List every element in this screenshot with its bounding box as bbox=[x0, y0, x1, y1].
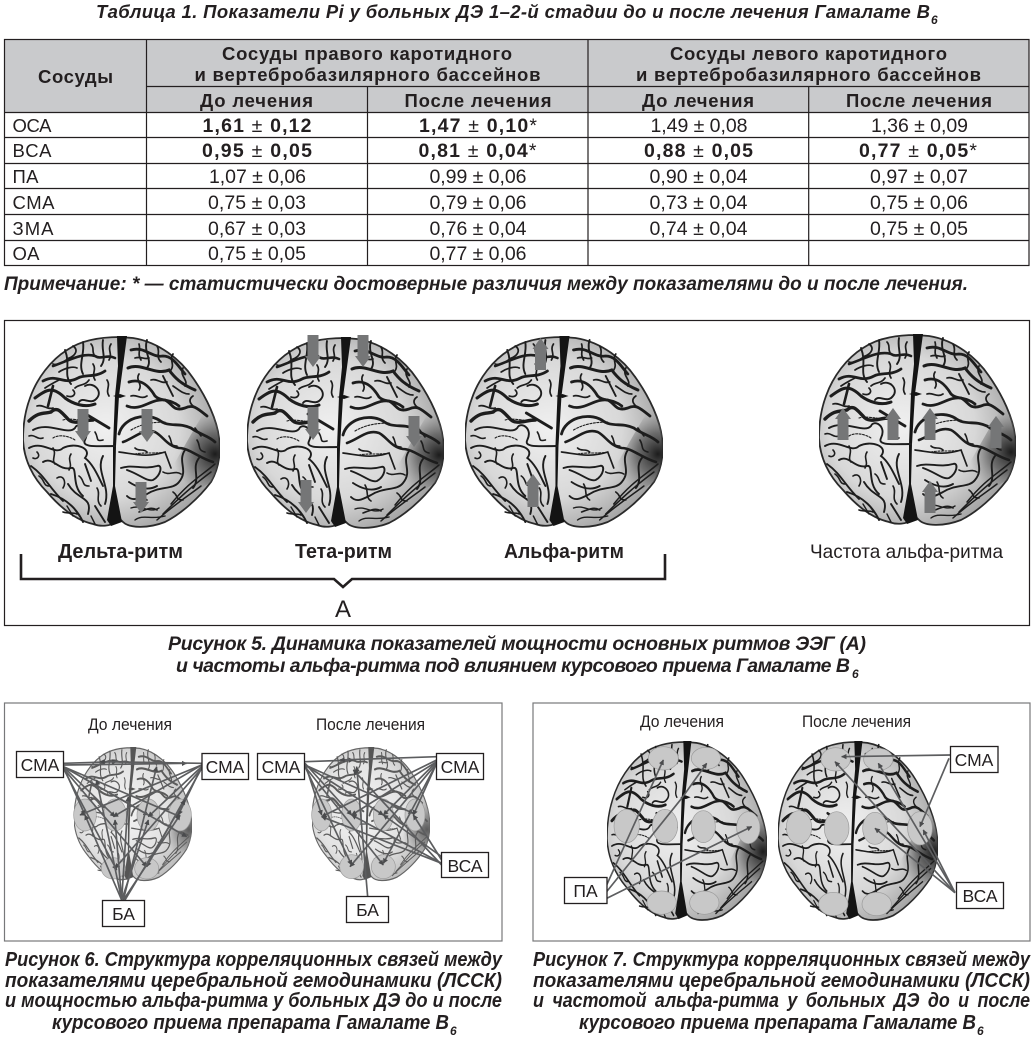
row: ОСА: 1,47 ± 0,10* bbox=[419, 115, 537, 137]
row: ВСА: 0,81 ± 0,04* bbox=[418, 140, 537, 162]
label box: БА, after: БА bbox=[356, 900, 379, 920]
figure 6 caption: и мощностью альфа-ритма у больных ДЭ до и после bbox=[5, 989, 502, 1012]
label: theta rhythm: Тета-ритм bbox=[295, 541, 392, 563]
label: before treatment: До лечения bbox=[88, 716, 172, 734]
brain with correlations: before bbox=[63, 747, 202, 900]
label: delta rhythm: Дельта-ритм bbox=[58, 541, 183, 563]
table note: Примечание: * — статистически достоверные различия между показателями до и после лечения. bbox=[4, 274, 968, 295]
table header: Сосуды левого каротидного bbox=[670, 43, 947, 64]
table header: и вертебробазилярного бассейнов bbox=[194, 64, 540, 85]
row: ЗМА: 0,74 ± 0,04 bbox=[650, 218, 748, 240]
row: СМА: 0,79 ± 0,06 bbox=[430, 192, 526, 214]
table header: Сосуды bbox=[38, 66, 113, 87]
table header: До лечения bbox=[200, 90, 313, 111]
brain with regions: after bbox=[778, 741, 955, 920]
label box: ВСА: ВСА bbox=[962, 886, 998, 906]
brain with regions: before bbox=[607, 741, 767, 920]
row: ОСА: 1,49 ± 0,08 bbox=[650, 115, 748, 137]
row: ВСА: 0,88 ± 0,05 bbox=[644, 140, 753, 162]
figure 7 caption bbox=[533, 948, 1031, 1038]
figure 6 caption: 6 bbox=[450, 1024, 457, 1038]
bracket A bbox=[21, 554, 665, 587]
row: ПА: 0,97 ± 0,07 bbox=[870, 166, 968, 188]
figure 5 caption: Рисунок 5. Динамика показателей мощности основных ритмов ЭЭГ (А) bbox=[168, 633, 866, 655]
row: ПА: 0,99 ± 0,06 bbox=[430, 166, 526, 188]
brain: alpha frequency bbox=[819, 334, 1016, 525]
label: alpha rhythm: Альфа-ритм bbox=[504, 541, 624, 563]
row: ПА: 1,07 ± 0,06 bbox=[209, 166, 306, 188]
label box: СМА left, before bbox=[16, 752, 64, 778]
table header: После лечения bbox=[404, 90, 552, 111]
figure 6 caption: Рисунок 6. Структура корреляционных связей между bbox=[5, 948, 503, 971]
label box: СМА bbox=[950, 746, 998, 772]
row: ОА bbox=[12, 243, 526, 265]
label: A: А bbox=[335, 596, 351, 623]
row: ЗМА: 0,75 ± 0,05 bbox=[870, 218, 968, 240]
panel: figure 5 bbox=[4, 320, 1030, 626]
row: ПА bbox=[12, 166, 968, 188]
figure 5 caption: и частоты альфа-ритма под влиянием курсового приема Гамалате В bbox=[176, 655, 850, 677]
table title: 6 bbox=[931, 13, 938, 27]
label box: СМА right, after: СМА bbox=[441, 757, 480, 777]
row: ОСА: 1,61 ± 0,12 bbox=[202, 115, 312, 137]
figure 6 caption: показателями церебральной гемодинамики (ЛССК) bbox=[5, 969, 502, 992]
label: before treatment: До лечения bbox=[640, 713, 724, 731]
label box: СМА right, before: СМА bbox=[206, 757, 245, 777]
label box: СМА right, after bbox=[436, 754, 484, 780]
figure 6 caption: курсового приема препарата Гамалате В bbox=[52, 1011, 449, 1034]
label box: СМА left, after bbox=[258, 754, 304, 780]
figure 5 caption bbox=[168, 633, 866, 681]
label: after treatment: После лечения bbox=[316, 716, 425, 734]
row: ОСА bbox=[12, 115, 968, 137]
label box: БА, before: БА bbox=[112, 904, 135, 924]
label box: СМА: СМА bbox=[955, 750, 994, 770]
data table bbox=[4, 40, 1029, 266]
row: СМА bbox=[12, 192, 968, 214]
figure 5 caption: 6 bbox=[852, 667, 859, 681]
row: ВСА: 0,95 ± 0,05 bbox=[202, 140, 312, 162]
table title: Таблица 1. Показатели Pi у больных ДЭ 1–2-й стадии до и после лечения Гамалате В bbox=[96, 1, 930, 22]
row: СМА: 0,75 ± 0,06 bbox=[870, 192, 968, 214]
panel: figure 7 bbox=[533, 703, 1030, 941]
table header: До лечения bbox=[642, 90, 754, 111]
table header: После лечения bbox=[846, 90, 992, 111]
label box: ВСА, after bbox=[442, 852, 488, 878]
label box: БА, before bbox=[102, 900, 144, 926]
label: after treatment: После лечения bbox=[802, 713, 911, 731]
row: ЗМА bbox=[12, 218, 968, 240]
table header: Сосуды правого каротидного bbox=[222, 43, 512, 64]
brain with correlations: after bbox=[305, 747, 442, 897]
row: ОА: 0,75 ± 0,05 bbox=[208, 243, 306, 265]
panel: figure 6 bbox=[4, 703, 502, 941]
brain: theta rhythm bbox=[247, 335, 444, 528]
row: ЗМА: 0,76 ± 0,04 bbox=[430, 218, 527, 240]
row: СМА: СМА bbox=[12, 192, 55, 213]
row: ВСА: 0,77 ± 0,05* bbox=[859, 140, 977, 162]
table header: и вертебробазилярного бассейнов bbox=[636, 64, 981, 85]
row: ОА: ОА bbox=[12, 243, 40, 264]
label box: БА, after bbox=[346, 896, 388, 922]
row: ЗМА: ЗМА bbox=[12, 218, 54, 239]
label box: ВСА bbox=[956, 882, 1004, 908]
row: ОА: 0,77 ± 0,06 bbox=[430, 243, 526, 265]
row: ПА: ПА bbox=[12, 166, 39, 187]
label box: ВСА, after: ВСА bbox=[447, 856, 483, 876]
row: ЗМА: 0,67 ± 0,03 bbox=[208, 218, 306, 240]
row: СМА: 0,75 ± 0,03 bbox=[208, 192, 306, 214]
table header bbox=[38, 43, 992, 111]
row: ПА: 0,90 ± 0,04 bbox=[650, 166, 748, 188]
row: ВСА: ВСА bbox=[12, 140, 52, 161]
row: ОСА: ОСА bbox=[12, 115, 52, 136]
label box: СМА left, before: СМА bbox=[21, 755, 60, 775]
row: ВСА bbox=[12, 140, 977, 162]
label: alpha frequency: Частота альфа-ритма bbox=[810, 541, 1003, 563]
row: СМА: 0,73 ± 0,04 bbox=[650, 192, 748, 214]
figure 7 caption: 6 bbox=[977, 1024, 984, 1038]
label box: ПА bbox=[564, 878, 607, 904]
label box: ПА: ПА bbox=[573, 881, 598, 901]
row: ОСА: 1,36 ± 0,09 bbox=[871, 115, 968, 137]
figure 6 caption bbox=[5, 948, 503, 1038]
label box: СМА right, before bbox=[202, 754, 248, 780]
brain: delta rhythm bbox=[23, 336, 220, 527]
brain: alpha rhythm bbox=[465, 336, 663, 527]
figure 7 caption: курсового приема препарата Гамалате В bbox=[579, 1011, 976, 1034]
label box: СМА left, after: СМА bbox=[262, 757, 301, 777]
